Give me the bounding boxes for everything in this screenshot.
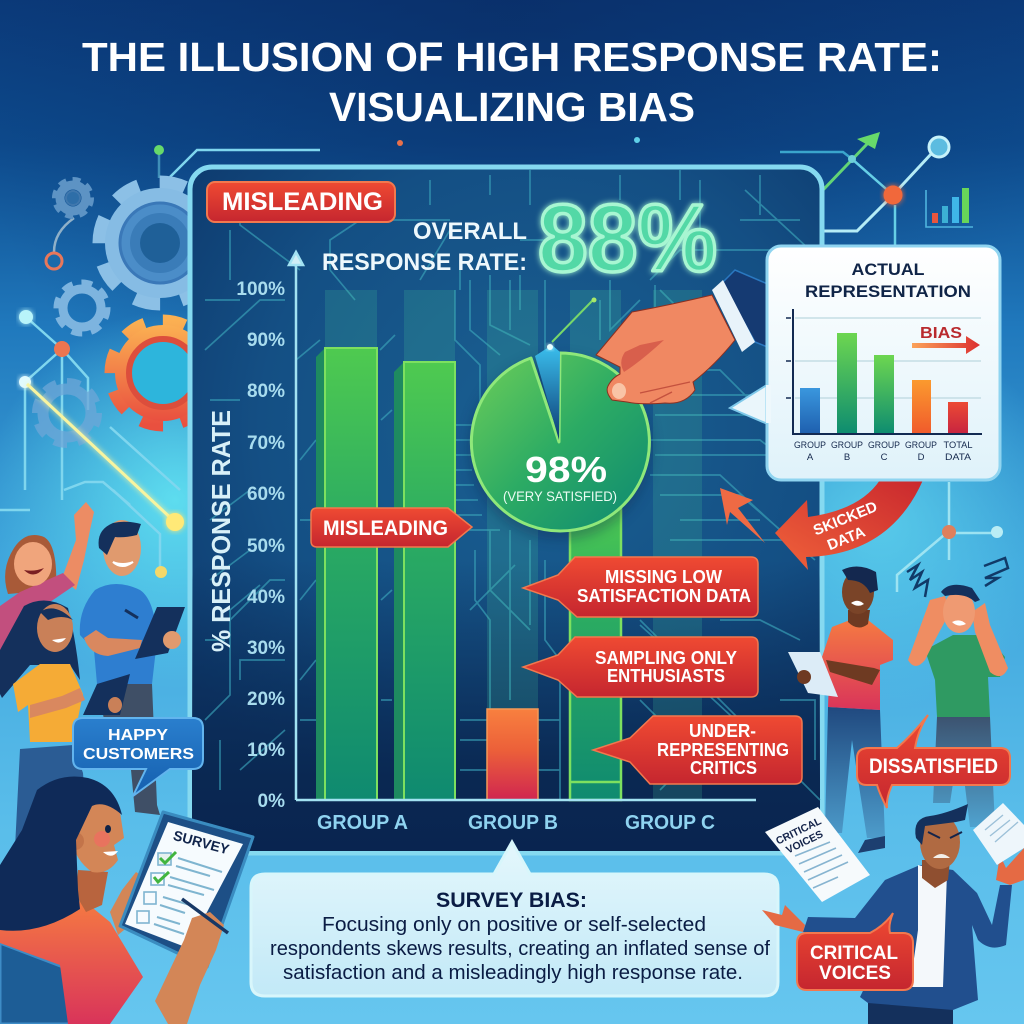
checklist [137, 853, 222, 934]
chair [0, 943, 80, 1024]
small orange arrow pointing to pie [720, 488, 765, 543]
card bar chart [786, 309, 982, 434]
callout: dissatisfied: DISSATISFIED [869, 755, 998, 778]
title [82, 34, 942, 130]
card chart labels: A [807, 452, 814, 463]
callout: under-representing critics: CRITICS [690, 758, 757, 778]
title: THE ILLUSION OF HIGH RESPONSE RATE: [82, 34, 942, 80]
top right tech decoration: arrow, nodes, mini chart [780, 132, 973, 246]
neck and head [922, 860, 950, 888]
card chart labels: C [881, 452, 888, 463]
y axis tick labels: 0% [258, 791, 285, 812]
callout: dissatisfied [857, 715, 1010, 808]
card chart labels: GROUP [831, 440, 863, 451]
y axis tick labels: 100% [236, 279, 285, 300]
left tech decoration: gears and circuit nodes [0, 145, 320, 578]
y axis tick labels: 80% [247, 381, 285, 402]
callout: sampling only enthusiasts [523, 637, 758, 697]
stress squiggles [907, 558, 1008, 597]
medium gear [57, 283, 107, 333]
callout: happy customers [73, 718, 203, 796]
card chart labels: GROUP [905, 440, 937, 451]
callout: missing low satisfaction data: MISSING LOW [605, 567, 722, 587]
person: man in green shirt holding head [908, 585, 1008, 827]
bar: group C green [570, 500, 621, 800]
bar chart [289, 252, 756, 800]
curved arrow: skicked data: DATA [825, 523, 868, 554]
y axis tick labels [236, 279, 285, 812]
x axis group labels: GROUP C [625, 812, 715, 834]
axes [289, 252, 756, 800]
circuit pattern [205, 170, 820, 800]
y axis tick labels: 50% [247, 536, 285, 557]
arm to tablet [110, 872, 148, 935]
trousers [868, 1003, 953, 1024]
card chart labels: GROUP [794, 440, 826, 451]
callout: critical voices [797, 913, 913, 990]
translucent gear [36, 382, 98, 444]
x axis group labels: GROUP B [468, 812, 558, 834]
tablet [83, 674, 130, 715]
card chart labels: GROUP [868, 440, 900, 451]
flying paper [973, 803, 1024, 865]
person: waving woman, pink shirt [0, 502, 94, 650]
callout: survey bias: SURVEY BIAS: [436, 889, 587, 912]
bar: group B orange [487, 709, 538, 800]
x axis group labels [317, 812, 715, 834]
tablet [120, 812, 253, 967]
person: man in blue shirt with tablet [80, 520, 185, 815]
card: actual representation: REPRESENTATION [805, 282, 971, 301]
callout: happy customers: HAPPY [108, 727, 168, 744]
misleading badge: MISLEADING [222, 188, 383, 216]
callout: missing low satisfaction data [523, 557, 758, 617]
callout: survey bias: satisfaction and a misleadingly high response rate. [283, 962, 743, 984]
person: angry man in blue jacket [762, 804, 1024, 1024]
callout: missing low satisfaction data: SATISFACTION DATA [577, 586, 751, 606]
person: woman filling in survey [0, 776, 253, 1024]
shirt [0, 900, 143, 1024]
curved arrow: skicked data: SKICKED [811, 498, 880, 539]
y axis tick labels: 70% [247, 433, 285, 454]
arm and paper [788, 652, 838, 697]
callout: critical voices: VOICES [819, 963, 891, 984]
mini bar chart icon [926, 188, 973, 227]
curved arrow: skicked data [775, 480, 923, 570]
callout: under-representing critics [593, 716, 802, 784]
paper: critical voices: VOICES [784, 828, 825, 856]
overall response rate label: RESPONSE RATE: [322, 249, 527, 276]
y axis tick labels: 40% [247, 587, 285, 608]
hand pinching the pie [596, 270, 770, 404]
hair [0, 776, 122, 931]
title: VISUALIZING BIAS [329, 84, 695, 130]
y axis tick labels: 20% [247, 689, 285, 710]
pie chart 98% [468, 298, 652, 540]
callout: survey bias [251, 842, 778, 996]
overall response rate label [322, 218, 527, 276]
ring node [46, 253, 62, 269]
callout: under-representing critics: UNDER- [689, 721, 756, 741]
card chart labels: B [844, 452, 850, 463]
misleading badge [207, 182, 395, 222]
pie chart 98%: 98% [525, 449, 607, 490]
misleading arrow tag: MISLEADING [323, 517, 448, 540]
panel: main dashboard [190, 167, 822, 853]
card chart labels [794, 440, 972, 463]
overall response rate label: OVERALL [413, 218, 527, 245]
paper: critical voices: CRITICAL [774, 815, 824, 847]
callout: happy customers: CUSTOMERS [83, 746, 194, 763]
callout: sampling only enthusiasts: SAMPLING ONLY [595, 648, 737, 668]
bias arrow [912, 325, 980, 354]
ghost bars [325, 290, 702, 800]
callout: survey bias: Focusing only on positive or self-selected [322, 914, 706, 936]
white shirt [910, 865, 947, 987]
card chart labels: TOTAL [944, 440, 972, 451]
callout: critical voices: CRITICAL [810, 943, 898, 964]
orange gear [111, 321, 215, 425]
person: man in orange shirt reading paper [788, 566, 893, 853]
decorative nodes top [397, 137, 640, 146]
tablet [135, 607, 185, 659]
tablet: SURVEY [172, 827, 232, 857]
x axis group labels: GROUP A [317, 812, 408, 834]
big number 88%: 88% [538, 185, 717, 292]
misleading arrow tag [311, 508, 472, 547]
y axis tick labels: 90% [247, 330, 285, 351]
jacket [803, 865, 1012, 1010]
card: actual representation [730, 246, 1000, 480]
card chart labels: DATA [945, 452, 972, 463]
callout: sampling only enthusiasts: ENTHUSIASTS [607, 666, 725, 686]
card: actual representation: ACTUAL [852, 260, 924, 279]
y axis tick labels: 60% [247, 484, 285, 505]
bar: group A second [394, 362, 455, 800]
paper: critical voices [765, 807, 870, 902]
bar: group A first [316, 348, 377, 800]
person: woman in yellow shirt with tablet [0, 600, 130, 848]
right circuit connector decoration [897, 482, 1003, 592]
bias arrow: BIAS [920, 325, 962, 342]
hands [762, 905, 805, 932]
vertical axis label: % RESPONSE RATE [206, 410, 236, 652]
y axis tick labels: 10% [247, 740, 285, 761]
neck and face [76, 870, 108, 912]
small gear [56, 181, 90, 215]
card chart labels: D [918, 452, 925, 463]
y axis tick labels: 30% [247, 638, 285, 659]
writing hand and pen [155, 899, 228, 1024]
callout: survey bias: respondents skews results, creating an inflated sense of [270, 938, 770, 960]
pie chart 98%: (VERY SATISFIED) [503, 489, 617, 504]
large blue gear [100, 183, 220, 303]
callout: under-representing critics: REPRESENTING [657, 740, 789, 760]
